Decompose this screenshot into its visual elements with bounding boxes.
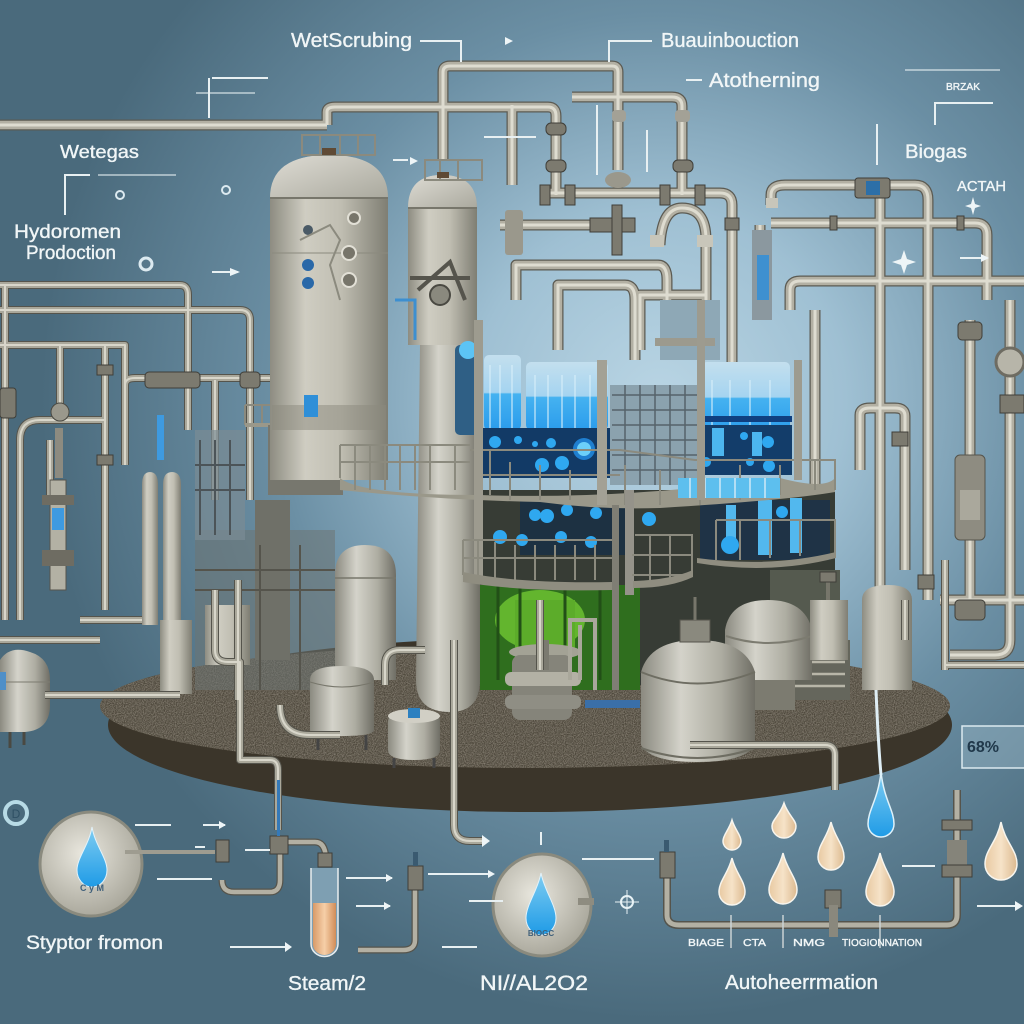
center disc: NI/AL2O2 xyxy=(493,854,594,956)
left instrument column xyxy=(42,415,164,590)
label: Hydoromen Prodoction: Prodoction xyxy=(26,243,116,264)
label: Wetegas: Wetegas xyxy=(60,142,139,162)
title: WetScrubing: WetScrubing xyxy=(291,30,412,52)
tank: dome behind right xyxy=(725,600,812,680)
label: NI//AL2O2: NI//AL2O2 xyxy=(480,972,588,995)
upper-left walkway around large vessel xyxy=(245,405,343,495)
falling blue droplet xyxy=(868,690,894,837)
label: manifold scale captions: NMG xyxy=(793,938,825,949)
dark lower plant block xyxy=(480,490,840,685)
valves on upper pipes xyxy=(505,110,964,320)
left disc: styptor fromon xyxy=(5,802,229,916)
left tall cylinders and machinery xyxy=(142,430,335,694)
tower rooftop railings xyxy=(302,135,482,180)
tank: main horizontal vessel xyxy=(641,597,755,762)
grey vessel left of column xyxy=(335,545,396,680)
manifold pipe xyxy=(660,790,972,948)
label: Biogas: Biogas xyxy=(905,142,967,163)
label: manifold scale captions xyxy=(688,938,922,949)
central machinery xyxy=(505,620,640,720)
pipe to center disc xyxy=(358,852,423,950)
title: Atotherning: Atotherning xyxy=(709,70,820,92)
label: ACTAH: ACTAH xyxy=(957,178,1006,195)
label: Autoheerrmation: Autoheerrmation xyxy=(725,972,878,994)
left pipe network xyxy=(0,285,300,640)
tank: column vessel xyxy=(395,175,480,712)
blue glass reactors xyxy=(455,341,792,478)
tank: right grey vessel xyxy=(810,572,912,690)
test tube xyxy=(311,868,338,956)
lower gallery platform xyxy=(463,520,836,590)
label: manifold scale captions: TIOGIONNATION xyxy=(842,938,922,949)
callout: 68 percent: 68% xyxy=(967,739,999,756)
back pipe network xyxy=(0,66,1024,655)
central plant background scaffold xyxy=(610,300,720,485)
label: manifold scale captions: CTA xyxy=(743,938,766,949)
label: Styptor fromon: Styptor fromon xyxy=(26,933,163,954)
left disc: styptor fromon: C y M xyxy=(80,883,104,893)
label: Hydoromen Prodoction xyxy=(14,222,121,264)
label: small top-right tag: BRZAK xyxy=(946,82,980,93)
front pipe network xyxy=(45,322,1024,841)
beige product droplets xyxy=(719,803,1017,906)
callout: 68 percent xyxy=(962,726,1024,768)
title: Buauinbouction: Buauinbouction xyxy=(661,30,799,52)
upper gallery platform xyxy=(340,445,835,508)
tank: small skid vessels xyxy=(310,666,440,768)
ground platform xyxy=(100,638,952,812)
label: Steam/2: Steam/2 xyxy=(288,973,366,995)
left disc: styptor fromon: D xyxy=(12,807,21,821)
machinery cabinets right xyxy=(755,640,850,710)
pipe to test tube xyxy=(222,780,332,892)
label: Hydoromen Prodoction: Hydoromen xyxy=(14,222,121,243)
tank: large vessel xyxy=(270,155,388,480)
left storage vessel xyxy=(0,650,50,748)
label: manifold scale captions: BIAGE xyxy=(688,938,724,949)
center disc: NI/AL2O2: BIOGC xyxy=(528,929,554,938)
blue indicator lights xyxy=(489,428,802,555)
gallery support columns xyxy=(474,300,802,690)
green reactor chamber xyxy=(480,585,640,690)
